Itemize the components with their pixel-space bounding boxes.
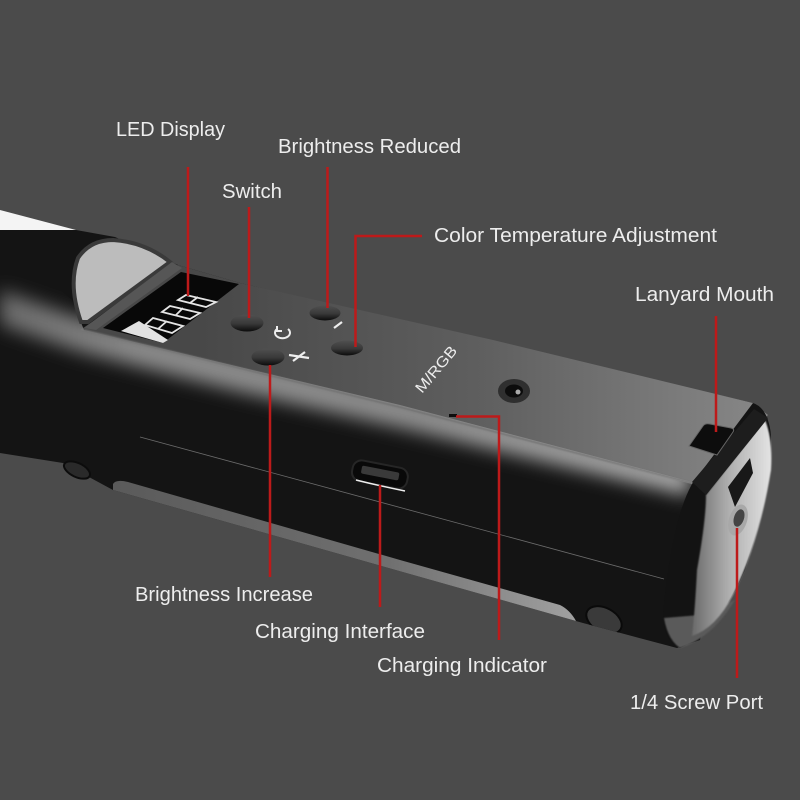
end cap (663, 403, 771, 648)
label: LED Display: LED Display (116, 119, 225, 141)
lanyard mouth (689, 424, 734, 455)
line: color temperature (356, 236, 422, 347)
line: LED display (187, 167, 189, 296)
line: lanyard mouth (715, 316, 717, 432)
side light strip (113, 481, 576, 621)
icon: plus (289, 352, 309, 361)
callout lines (188, 167, 737, 678)
label: 1/4 Screw Port: 1/4 Screw Port (630, 692, 763, 714)
button: colour temperature (331, 340, 363, 356)
cover frame bar (84, 262, 182, 330)
seam line (140, 437, 664, 579)
light cover window (74, 240, 170, 322)
label: Charging Indicator: Charging Indicator (377, 655, 547, 677)
button: switch (230, 314, 264, 332)
end cap bottom rim (664, 600, 735, 648)
button: brightness reduced (310, 306, 340, 320)
charging LED (449, 414, 457, 417)
cap slot (728, 458, 753, 507)
label: Charging Interface: Charging Interface (255, 621, 425, 643)
top face (80, 265, 768, 484)
labels (116, 119, 774, 714)
end cap light face (692, 420, 771, 636)
line: switch (248, 207, 250, 318)
body side (0, 230, 753, 648)
label: Switch: Switch (222, 181, 282, 203)
device body (0, 210, 771, 648)
icon: minus (334, 322, 342, 328)
label: Brightness Increase: Brightness Increase (135, 584, 313, 606)
lens dot (498, 379, 530, 403)
line: charging indicator (456, 416, 499, 640)
display lit corner (121, 321, 168, 343)
label: Color Temperature Adjustment: Color Temperature Adjustment (434, 225, 717, 247)
line: charging interface (379, 485, 381, 607)
label: Brightness Reduced: Brightness Reduced (278, 136, 461, 158)
icon: screw port (724, 502, 752, 538)
label: Lanyard Mouth: Lanyard Mouth (635, 284, 774, 306)
icon: power (275, 326, 290, 338)
top face lower edge (84, 330, 692, 483)
highlight band (0, 290, 690, 496)
display digits (145, 295, 216, 333)
cap ridge (692, 409, 768, 495)
USB-C port (350, 459, 409, 491)
side hole right (586, 606, 622, 632)
infographic (0, 121, 773, 709)
side hole left (61, 458, 93, 482)
button: brightness increase (252, 348, 284, 366)
display panel (103, 272, 239, 343)
line: screw port (736, 528, 738, 678)
line: brightness increase (269, 365, 271, 577)
line: brightness reduced (326, 167, 329, 308)
model label: M/RGB (412, 343, 461, 397)
white light tube wedge (0, 210, 76, 230)
